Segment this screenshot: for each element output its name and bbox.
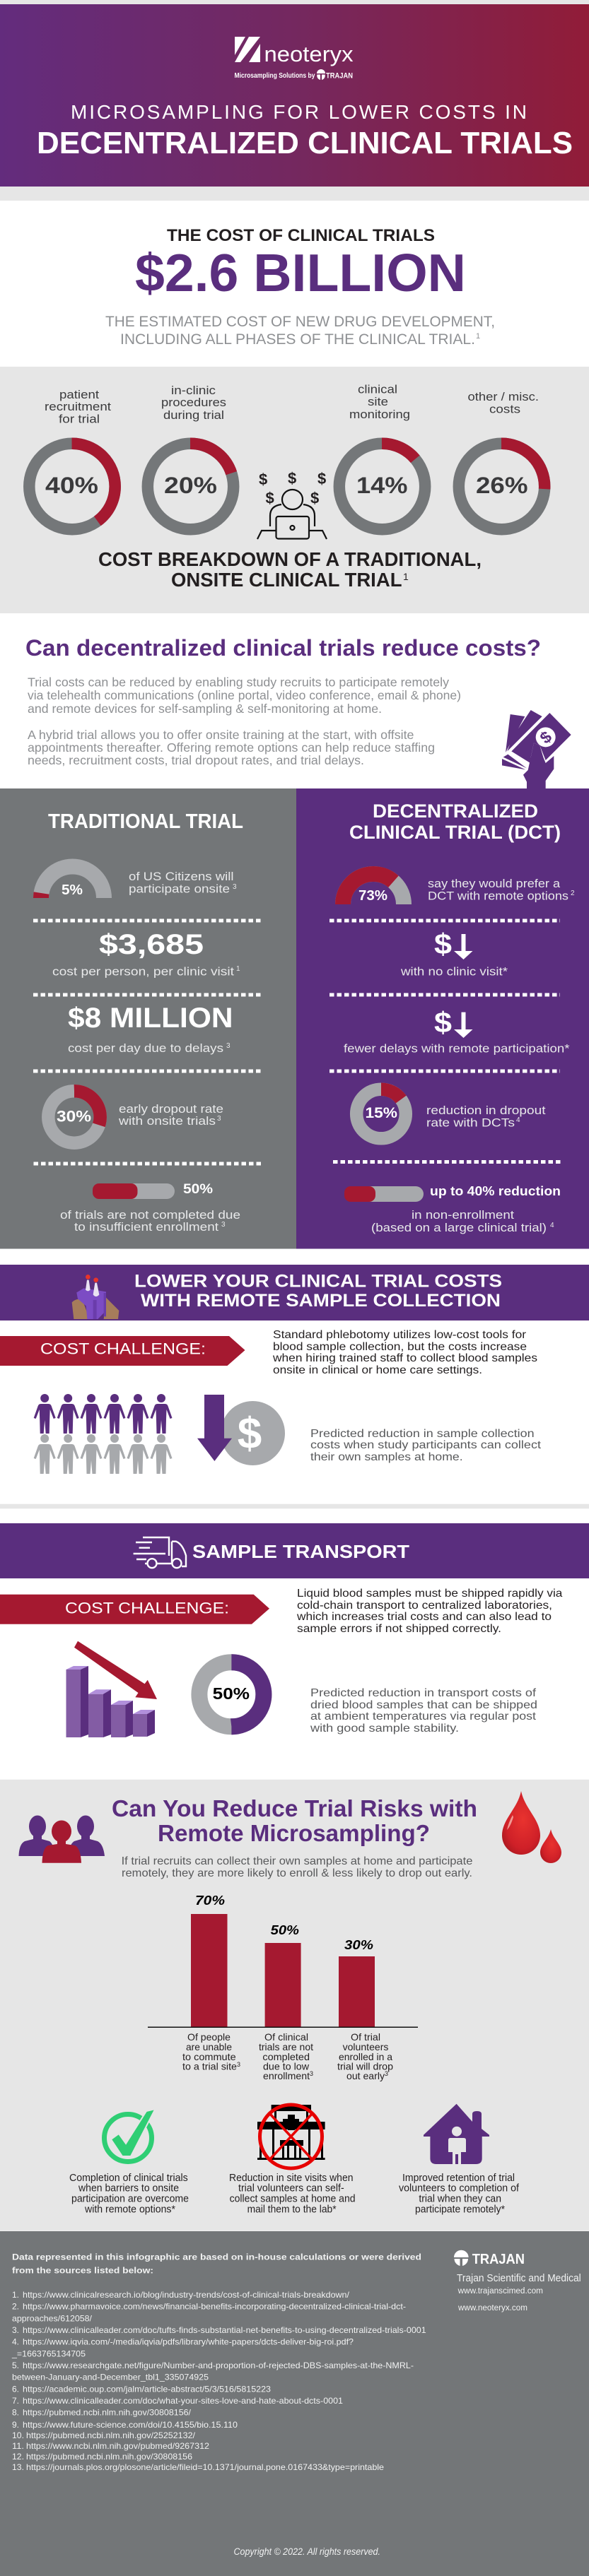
bar label: commute: Of people <box>187 2031 231 2043</box>
title <box>37 101 573 160</box>
text: site visits <box>229 2173 356 2216</box>
source list: https://academic.oup.com/jalm/article-abstract/5/3/516/5815223 <box>23 2384 271 2394</box>
text: insufficient enrollment: of trials are not completed due <box>60 1209 240 1222</box>
text: site visits: Reduction in site visits when <box>229 2173 354 2184</box>
panel: reduce trial risks <box>0 1780 589 2231</box>
label: patient recruitment <box>45 388 111 425</box>
sources intro: Data represented in this infographic are based on in-house calculations or were derived <box>12 2252 421 2262</box>
bar label: commute: 3 <box>237 2061 240 2068</box>
progress pill: 40% reduction: up to 40% reduction <box>430 1184 561 1198</box>
bar label: drop out early <box>337 2031 393 2081</box>
icon: person at laptop with dollar signs: $ <box>310 489 319 507</box>
heading <box>134 1272 502 1311</box>
text: predicted transport reduction: Predicted reduction in transport costs of <box>310 1687 537 1699</box>
text: completion: when barriers to onsite <box>78 2183 179 2194</box>
bar label: low enrollment: completed <box>262 2051 310 2062</box>
label: patient recruitment: recruitment <box>45 400 111 413</box>
source list: between-January-and-December_tbl1_335074925 <box>12 2373 209 2382</box>
donut: 15% <box>356 1089 406 1138</box>
text: prefer a DCT <box>428 878 575 903</box>
icon: microsampling device in hand <box>72 1275 119 1319</box>
text: site visits: mail them to the lab* <box>247 2204 337 2216</box>
panel: cost of clinical trials <box>105 226 495 348</box>
icon: blood drops <box>502 1791 561 1863</box>
text: insufficient enrollment: 3 <box>221 1221 226 1229</box>
text: prefer a DCT: DCT with remote options <box>428 890 568 903</box>
source list: https://www.ncbi.nlm.nih.gov/pubmed/9267312 <box>26 2441 209 2451</box>
bar label: low enrollment: enrollment <box>263 2070 310 2081</box>
text: retention: trial when they can <box>419 2194 501 2205</box>
text: non-enrollment: in non-enrollment <box>412 1209 514 1222</box>
panel: sample transport banner <box>0 1523 589 1578</box>
donut: 26% <box>459 444 544 529</box>
progress pill: 40% reduction <box>344 1184 561 1202</box>
source list: 11. <box>12 2441 24 2451</box>
logo: neoteryx: Microsampling Solutions by <box>235 72 315 80</box>
heading: WITH REMOTE SAMPLE COLLECTION <box>141 1291 501 1311</box>
icon: group of people <box>18 1816 105 1863</box>
text: subheading <box>122 1855 473 1879</box>
text: predicted transport reduction <box>310 1687 537 1735</box>
text: predicted transport reduction: with good sample stability. <box>310 1723 459 1735</box>
heading: Remote Microsampling? <box>158 1820 430 1846</box>
source list: 10. <box>12 2430 24 2440</box>
icon: person at laptop with dollar signs: $ <box>259 471 267 488</box>
stat: $3,685 <box>52 929 240 978</box>
panel: remote sample collection banner <box>0 1265 589 1321</box>
label: clinical site monitoring: monitoring <box>349 408 410 421</box>
icon: hand holding money: $ <box>537 727 555 748</box>
heading: Can decentralized clinical trials reduce costs? <box>25 635 541 661</box>
logo: neoteryx <box>235 37 354 81</box>
text: US citizens: 3 <box>233 883 237 891</box>
icon grid: people <box>34 1394 173 1474</box>
donut: 30%: 30% <box>57 1108 91 1125</box>
text: early dropout: early dropout rate <box>119 1103 223 1116</box>
donut: 50% <box>199 1662 264 1727</box>
icon: delivery truck <box>134 1537 186 1568</box>
big number: $2.6 BILLION <box>135 243 466 302</box>
bar label: drop out early: enrolled in a <box>339 2051 392 2062</box>
bar label: drop out early: out early <box>346 2070 385 2081</box>
label: in-clinic procedures: procedures <box>161 396 226 409</box>
text: insufficient enrollment <box>60 1209 240 1234</box>
source list: 3. <box>12 2325 19 2335</box>
website links: www.trajanscimed.com <box>457 2287 543 2296</box>
panel: cost breakdown <box>0 367 589 613</box>
bar label: low enrollment: trials are not <box>259 2041 313 2052</box>
stat: $8 million: 3 <box>226 1042 231 1050</box>
donut: 14%: 14% <box>356 473 408 498</box>
heading: CLINICAL TRIAL (DCT) <box>349 822 561 843</box>
source list: https://www.iqvia.com/-/media/iqvia/pdfs/library/white-papers/dcts-deliver-big-roi.pdf? <box>23 2337 354 2347</box>
heading: SAMPLE TRANSPORT <box>192 1541 409 1562</box>
title: DECENTRALIZED CLINICAL TRIALS <box>37 126 573 160</box>
heading: DECENTRALIZED <box>373 800 538 822</box>
text: prefer a DCT: say they would prefer a <box>428 878 561 890</box>
half gauge: 73% <box>343 874 404 904</box>
stat: lower cost, no clinic visit: with no clinic visit* <box>400 965 508 978</box>
icon: dollar coin with down arrow: $ <box>238 1410 262 1458</box>
label: in-clinic procedures: during trial <box>163 408 224 422</box>
title: MICROSAMPLING FOR LOWER COSTS IN <box>71 101 527 123</box>
text: predicted sample collection reduction: Predicted reduction in sample collection <box>310 1428 535 1440</box>
body text: needs, recruitment costs, trial dropout rates, and trial delays. <box>28 753 364 767</box>
logo: Trajan <box>454 2250 581 2284</box>
source list: 7. <box>12 2396 19 2406</box>
bar label: low enrollment: 3 <box>310 2070 313 2077</box>
source list: https://www.clinicalleader.com/doc/tufts-finds-substantial-net-benefits-to-using-decentralized-trials-0001 <box>23 2325 426 2335</box>
website links <box>457 2287 543 2312</box>
icon: hand holding money <box>502 710 571 791</box>
half gauge: 73%: 73% <box>358 888 387 904</box>
text: liquid blood samples: sample errors if not shipped correctly. <box>297 1623 501 1635</box>
heading: LOWER YOUR CLINICAL TRIAL COSTS <box>134 1272 502 1292</box>
text: early dropout <box>118 1103 223 1128</box>
panel: traditional trial <box>0 788 296 1249</box>
text: predicted sample collection reduction: their own samples at home. <box>310 1451 463 1463</box>
bar label: drop out early: volunteers <box>343 2041 388 2052</box>
icon: person at laptop with dollar signs: $ <box>266 489 274 507</box>
body text: appointments thereafter. Offering remote options can help reduce staffing <box>28 740 435 755</box>
label: other costs <box>468 390 539 415</box>
text: subheading: remotely, they are more likely to enroll & less likely to drop out early. <box>122 1867 472 1879</box>
text: liquid blood samples: Liquid blood samples must be shipped rapidly via <box>297 1588 563 1600</box>
source list <box>11 2290 426 2472</box>
bar label: drop out early: Of trial <box>351 2031 380 2043</box>
logo: Trajan: TRAJAN <box>472 2252 525 2267</box>
label: patient recruitment: patient <box>59 388 99 401</box>
source list: https://journals.plos.org/plosone/article/fileid=10.1371/journal.pone.0167433&type=printable <box>26 2462 384 2472</box>
text: standard phlebotomy <box>272 1329 537 1376</box>
body text: and remote devices for self-sampling & self-monitoring at home. <box>28 702 382 716</box>
source list: https://www.clinicalleader.com/doc/what-your-sites-love-and-hate-about-dcts-0001 <box>23 2396 343 2406</box>
text: standard phlebotomy: Standard phlebotomy utilizes low-cost tools for <box>273 1329 527 1341</box>
bar label: drop out early: 3 <box>385 2070 388 2077</box>
text: standard phlebotomy: when hiring trained staff to collect blood samples <box>272 1352 537 1364</box>
bar label: commute: to commute <box>182 2051 236 2062</box>
body text: via telehealth communications (online portal, video conference, email & phone) <box>28 688 461 702</box>
half gauge: 5% <box>41 867 104 898</box>
callout: cost challenge (collection) <box>0 1336 245 1366</box>
bar chart <box>148 1893 418 2081</box>
text: non-enrollment: (based on a large clinical trial) <box>371 1222 547 1234</box>
text: predicted sample collection reduction <box>310 1428 542 1463</box>
bar value labels: 30% <box>344 1938 373 1952</box>
text: site visits: collect samples at home and <box>230 2194 356 2205</box>
body text: Trial costs can be reduced by enabling study recruits to participate remotely <box>28 675 449 690</box>
donut: 15%: 15% <box>365 1105 397 1121</box>
text: early dropout: with onsite trials <box>118 1115 216 1128</box>
source list: 9. <box>12 2420 19 2430</box>
callout: cost challenge (transport) <box>0 1595 269 1624</box>
text: non-enrollment: 4 <box>550 1222 554 1229</box>
description: INCLUDING ALL PHASES OF THE CLINICAL TRIAL. <box>120 331 475 348</box>
text: completion: Completion of clinical trials <box>69 2173 188 2184</box>
source list: https://www.clinicalresearch.io/blog/industry-trends/cost-of-clinical-trials-breakdown/ <box>23 2290 350 2300</box>
icon: green check <box>105 2109 156 2162</box>
stat: $8 million <box>68 1003 233 1055</box>
donut: 20% <box>148 444 233 529</box>
copyright: Copyright © 2022. All rights reserved. <box>233 2546 380 2557</box>
text: insufficient enrollment: to insufficient enrollment <box>74 1221 218 1234</box>
callout: cost challenge (collection): COST CHALLENGE: <box>40 1340 206 1358</box>
text: standard phlebotomy: onsite in clinical or home care settings. <box>273 1364 482 1376</box>
label: clinical site monitoring: site <box>368 395 388 408</box>
text: dropout reduction: reduction in dropout <box>426 1104 546 1117</box>
text: retention: participate remotely* <box>415 2204 505 2216</box>
donut: 26%: 26% <box>476 473 528 498</box>
text: retention <box>399 2173 520 2216</box>
source list: https://pubmed.ncbi.nlm.nih.gov/30808156/ <box>23 2408 192 2418</box>
heading: Can You Reduce Trial Risks with <box>112 1795 477 1821</box>
text: US citizens: participate onsite <box>129 883 230 896</box>
source list: https://www.future-science.com/doi/10.4155/bio.15.110 <box>23 2420 238 2430</box>
body text: A hybrid trial allows you to offer onsite training at the start, with offsite <box>28 728 414 742</box>
heading <box>112 1795 477 1846</box>
source list: 4. <box>12 2337 19 2347</box>
text: US citizens: of US Citizens will <box>129 870 233 883</box>
bar value labels <box>195 1893 373 1952</box>
donut: 40% <box>29 444 115 529</box>
sources intro <box>12 2252 421 2275</box>
donut: 30% <box>48 1091 100 1143</box>
text: dropout reduction: rate with DCTs <box>426 1116 515 1129</box>
source list: https://pubmed.ncbi.nlm.nih.gov/30808156 <box>26 2452 192 2462</box>
source list: 8. <box>12 2408 19 2418</box>
callout: cost challenge (transport): COST CHALLENGE: <box>65 1599 229 1617</box>
label: other costs: costs <box>489 403 520 415</box>
panel: footer sources <box>0 2231 589 2576</box>
text: dropout reduction <box>426 1104 546 1129</box>
source list: https://pubmed.ncbi.nlm.nih.gov/25252132/ <box>26 2430 196 2440</box>
text: predicted transport reduction: at ambient temperatures via regular post <box>310 1711 537 1723</box>
source list: approaches/612058/ <box>12 2313 93 2323</box>
text: non-enrollment <box>371 1209 554 1234</box>
label: patient recruitment: for trial <box>59 413 100 425</box>
logo: Trajan: Trajan Scientific and Medical <box>457 2273 581 2284</box>
donut: 20%: 20% <box>164 473 217 498</box>
stat: lower cost, no clinic visit <box>400 928 508 978</box>
text: retention: volunteers to completion of <box>399 2183 520 2194</box>
panel: header banner <box>0 0 589 201</box>
text: liquid blood samples <box>296 1588 563 1635</box>
label: in-clinic procedures <box>161 384 226 422</box>
bar value labels: 50% <box>271 1923 299 1937</box>
text: subheading: If trial recruits can collect their own samples at home and participate <box>122 1855 473 1867</box>
panel: decentralized clinical trial <box>296 788 589 1249</box>
text: completion: with remote options* <box>84 2204 175 2216</box>
label: clinical site monitoring: clinical <box>358 383 397 396</box>
stat: lower cost, fewer delays <box>344 1006 570 1056</box>
stat: lower cost, fewer delays: fewer delays with remote participation* <box>344 1043 570 1056</box>
heading: cost breakdown: 1 <box>403 571 409 582</box>
description: 1 <box>476 332 480 341</box>
source list: 12. <box>12 2452 24 2462</box>
bar value labels: 70% <box>195 1893 225 1908</box>
bar label: low enrollment: due to low <box>263 2060 310 2072</box>
icon: person at laptop with dollar signs: $ <box>317 470 326 488</box>
bar label: commute: to a trial site <box>182 2060 237 2072</box>
icon: person at laptop with dollar signs: $ <box>288 469 296 488</box>
sources intro: from the sources listed below: <box>12 2265 153 2275</box>
text: standard phlebotomy: blood sample collection, but the costs increase <box>273 1341 527 1353</box>
source list: 5. <box>12 2361 19 2370</box>
text: predicted transport reduction: dried blood samples that can be shipped <box>310 1699 537 1711</box>
half gauge: 5%: 5% <box>62 882 83 898</box>
panel: can decentralized trials reduce costs <box>25 635 571 791</box>
stat: $8 million: cost per day due to delays <box>68 1042 223 1055</box>
stat: $3,685: $3,685 <box>99 929 204 960</box>
source list: 6. <box>12 2384 19 2394</box>
heading: cost breakdown <box>98 548 482 591</box>
stat: $8 million: $8 MILLION <box>68 1003 233 1034</box>
icon: dollar coin with down arrow <box>197 1395 285 1465</box>
text: retention: Improved retention of trial <box>402 2173 515 2184</box>
text: prefer a DCT: 2 <box>571 890 575 897</box>
icon: house with person <box>424 2104 489 2164</box>
text: completion <box>69 2173 189 2216</box>
bar label: commute <box>182 2031 240 2072</box>
heading: cost breakdown: COST BREAKDOWN OF A TRADITIONAL, <box>98 548 482 570</box>
donut: 14% <box>339 444 425 529</box>
text: liquid blood samples: cold-chain transport to centralized laboratories, <box>297 1600 552 1612</box>
text: early dropout: 3 <box>217 1115 221 1123</box>
label: clinical site monitoring <box>349 383 410 421</box>
text: predicted sample collection reduction: costs when study participants can collect <box>310 1439 542 1451</box>
heading <box>349 800 561 843</box>
source list: 2. <box>12 2302 19 2312</box>
label: in-clinic procedures: in-clinic <box>171 384 216 397</box>
bar label: low enrollment <box>259 2031 313 2081</box>
progress pill: 50%: 50% <box>183 1182 213 1197</box>
label: other costs: other / misc. <box>468 390 539 403</box>
bar label: drop out early: trial will drop <box>337 2060 393 2072</box>
source list: 13. <box>12 2462 24 2472</box>
text: dropout reduction: 4 <box>516 1116 520 1124</box>
donut: 40%: 40% <box>45 473 98 498</box>
logo: neoteryx: TRAJAN <box>326 72 353 81</box>
source list: https://www.researchgate.net/figure/Number-and-proportion-of-rejected-DBS-samples-at-the-NMRL- <box>23 2361 414 2370</box>
source list: 1. <box>12 2290 19 2300</box>
stat: lower cost, no clinic visit: $ <box>434 928 452 960</box>
icon: person at laptop with dollar signs <box>257 469 327 539</box>
heading: THE COST OF CLINICAL TRIALS <box>167 226 435 245</box>
text: liquid blood samples: which increases trial costs and can also lead to <box>296 1611 552 1623</box>
heading: cost breakdown: ONSITE CLINICAL TRIAL <box>171 569 402 591</box>
text: site visits: trial volunteers can self- <box>238 2183 344 2194</box>
icon: crossed out clinic <box>257 2105 325 2168</box>
website links: www.neoteryx.com <box>457 2304 527 2312</box>
body text <box>28 675 461 767</box>
bar label: low enrollment: Of clinical <box>264 2031 308 2043</box>
source list: https://www.pharmavoice.com/news/financial-benefits-incorporating-decentralized-clinical-trial-dct- <box>23 2302 406 2312</box>
text: completion: participation are overcome <box>71 2194 189 2205</box>
heading: TRADITIONAL TRIAL <box>48 810 243 833</box>
progress pill: 50% <box>93 1182 213 1199</box>
logo: neoteryx: neoteryx <box>264 42 354 66</box>
text: US citizens <box>129 870 237 896</box>
stat: $3,685: 1 <box>236 965 240 973</box>
source list: _=1663765134705 <box>11 2348 86 2358</box>
description <box>105 313 495 348</box>
chart icon: declining bars with arrow <box>66 1641 157 1737</box>
donut: 50%: 50% <box>213 1684 250 1703</box>
stat: $3,685: cost per person, per clinic visit <box>52 965 234 978</box>
description: THE ESTIMATED COST OF NEW DRUG DEVELOPMENT, <box>105 313 495 330</box>
bar label: commute: are unable <box>186 2041 232 2052</box>
stat: lower cost, fewer delays: $ <box>434 1006 452 1039</box>
